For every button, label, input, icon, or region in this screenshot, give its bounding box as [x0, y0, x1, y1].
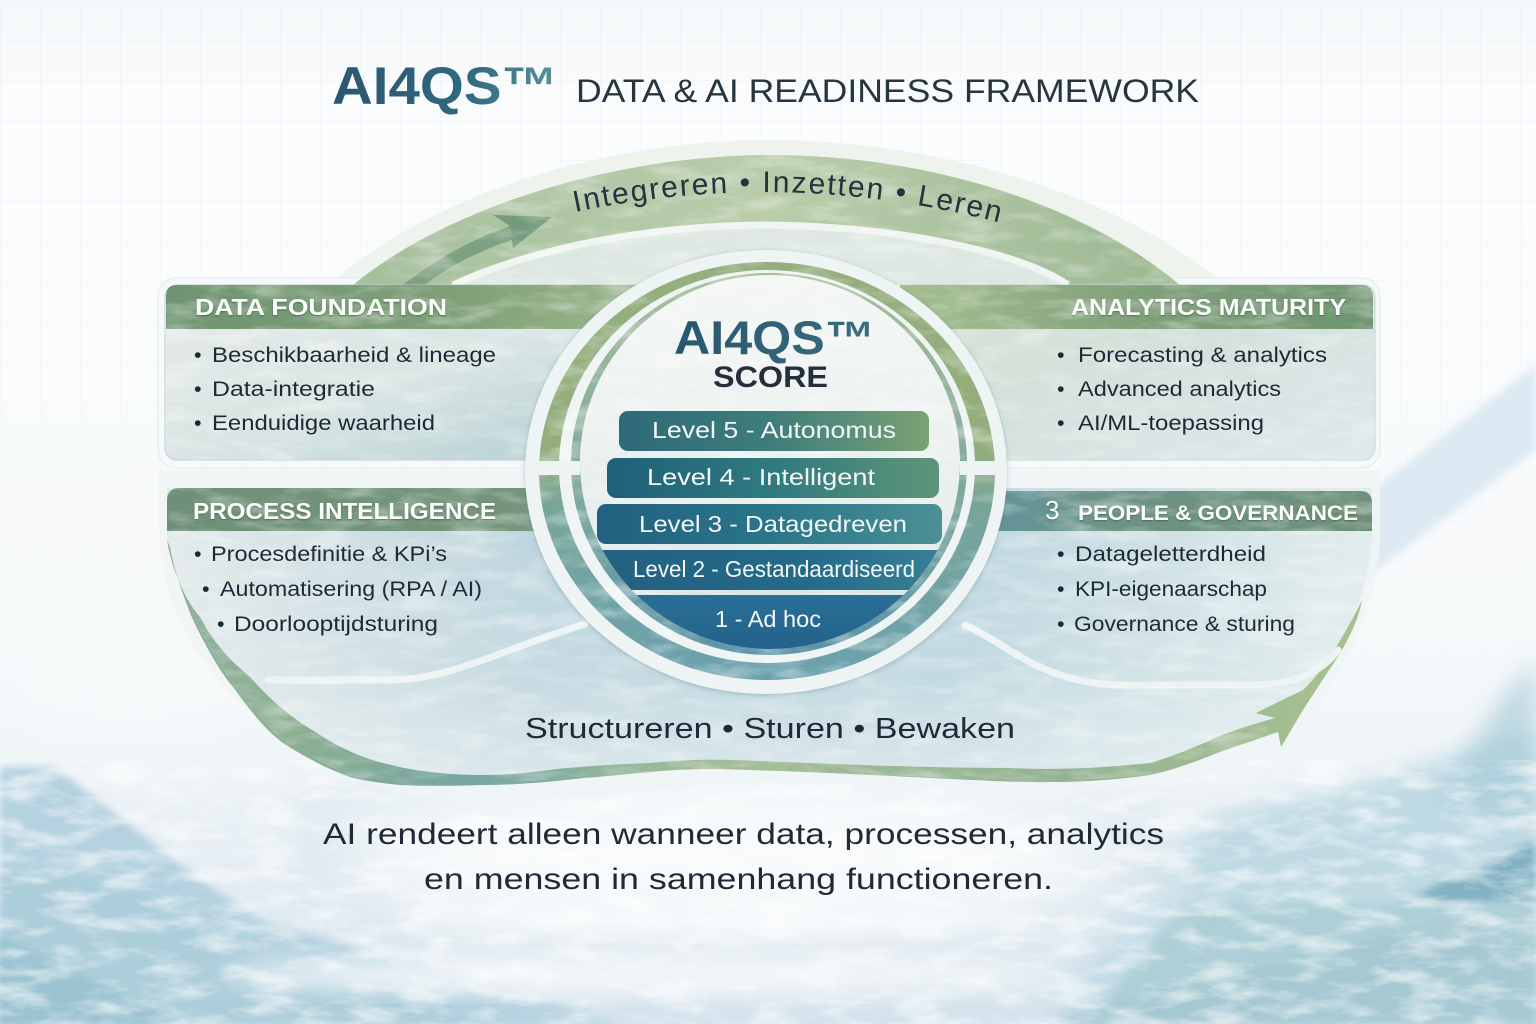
- heading: people and governance: PEOPLE & GOVERNANCE: [1078, 502, 1358, 525]
- level 3: Level 3 - Datagedreven: [639, 511, 907, 537]
- list: data foundation: •: [194, 411, 202, 435]
- list: process intelligence: Doorlooptijdsturing: [234, 612, 438, 636]
- level 5: Level 5 - Autonomus: [652, 417, 896, 443]
- list: analytics maturity: •: [1057, 343, 1065, 367]
- ring: [539, 262, 995, 680]
- list: people and governance: Governance & sturing: [1074, 612, 1295, 636]
- list: data foundation: Beschikbaarheid & lineage: [212, 343, 496, 367]
- closing statement: en mensen in samenhang functioneren.: [424, 863, 1053, 896]
- list: process intelligence: [194, 542, 482, 636]
- panel: lower basin: [167, 488, 1372, 775]
- arc band: Integreren, Inzetten, Leren: [353, 155, 1180, 285]
- list: people and governance: •: [1057, 577, 1065, 601]
- level 4: [607, 458, 939, 498]
- center heading: SCORE: [713, 361, 828, 394]
- list: data foundation: Eenduidige waarheid: [212, 411, 435, 435]
- list: people and governance: •: [1057, 612, 1065, 636]
- maturity levels: [585, 411, 955, 653]
- central score badge: [525, 250, 1007, 694]
- level 1: [636, 595, 904, 649]
- list: analytics maturity: [1057, 343, 1327, 435]
- arc label: Integreren • Inzetten • Leren: [574, 172, 1000, 222]
- list: process intelligence: Automatisering (RPA / AI): [220, 577, 482, 601]
- level 3: [597, 504, 942, 544]
- level 2: Level 2 - Gestandaardiseerd: [633, 556, 915, 582]
- center heading: AI4QS™: [674, 311, 875, 364]
- level 4: Level 4 - Intelligent: [647, 464, 876, 490]
- lower band label: Structureren • Sturen • Bewaken: [525, 713, 1015, 745]
- panel header: process intelligence: [167, 488, 600, 531]
- panel: data foundation: [165, 285, 645, 460]
- closing statement: [323, 818, 1164, 896]
- list: data foundation: [194, 343, 496, 435]
- list: analytics maturity: AI/ML-toepassing: [1078, 411, 1264, 435]
- level 5: [619, 411, 929, 451]
- list: analytics maturity: •: [1057, 377, 1065, 401]
- list: process intelligence: •: [217, 612, 225, 636]
- paper texture: [150, 150, 1390, 790]
- level 1: 1 - Ad hoc: [715, 606, 821, 632]
- list: data foundation: •: [194, 343, 202, 367]
- list: analytics maturity: Forecasting & analytics: [1078, 343, 1327, 367]
- separators in lower basin: [268, 624, 1338, 685]
- arrow: lower band: [167, 540, 1362, 786]
- title: [332, 57, 1199, 116]
- list: process intelligence: Procesdefinitie & KPi’s: [211, 542, 447, 566]
- title: AI4QS™: [332, 57, 558, 116]
- list: people and governance: KPI-eigenaarschap: [1075, 577, 1267, 601]
- list: process intelligence: •: [202, 577, 210, 601]
- arrow: top arc: [403, 215, 552, 285]
- list: process intelligence: •: [194, 542, 202, 566]
- list: people and governance: [1057, 542, 1295, 636]
- diagram frame: [158, 140, 1380, 799]
- panel: analytics maturity: [900, 285, 1375, 460]
- heading: people and governance: [1045, 495, 1358, 525]
- heading: data foundation: DATA FOUNDATION: [195, 294, 447, 320]
- list: analytics maturity: Advanced analytics: [1078, 377, 1281, 401]
- list: analytics maturity: •: [1057, 411, 1065, 435]
- title: DATA & AI READINESS FRAMEWORK: [576, 73, 1199, 109]
- panel header: people and governance: [940, 491, 1372, 531]
- outer rim: [525, 250, 1007, 694]
- list: data foundation: Data-integratie: [212, 377, 375, 401]
- closing statement: AI rendeert alleen wanneer data, processen, analytics: [323, 818, 1164, 851]
- center heading: [674, 311, 875, 394]
- level 2: [585, 550, 955, 590]
- heading: people and governance: 3: [1045, 495, 1059, 525]
- list: people and governance: •: [1057, 542, 1065, 566]
- list: people and governance: Datageletterdheid: [1075, 542, 1266, 566]
- heading: analytics maturity: ANALYTICS MATURITY: [1071, 294, 1346, 320]
- heading: process intelligence: PROCESS INTELLIGENCE: [193, 498, 496, 524]
- list: data foundation: •: [194, 377, 202, 401]
